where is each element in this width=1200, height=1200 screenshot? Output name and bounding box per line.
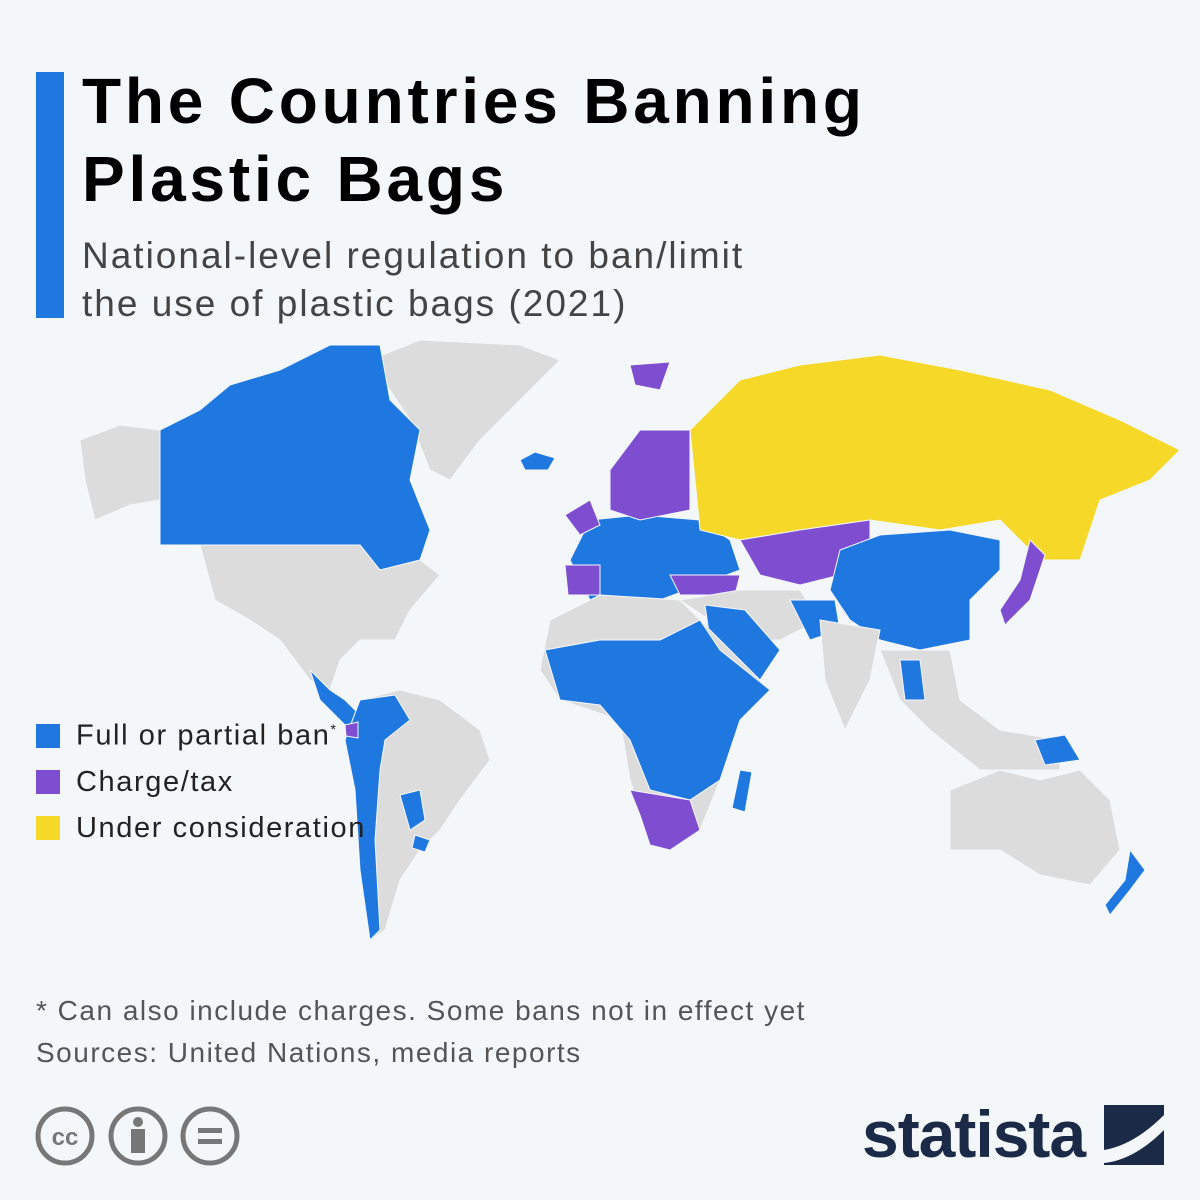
Central America: [310, 670, 365, 735]
China: [830, 530, 1000, 650]
statista logo: statista: [862, 1097, 1085, 1171]
title: [82, 65, 866, 215]
title: Plastic Bags: [82, 143, 508, 215]
Iceland: [520, 452, 555, 470]
Australia: [950, 770, 1120, 885]
world map: [80, 340, 1180, 939]
subtitle: the use of plastic bags (2021): [82, 283, 627, 324]
subtitle: [82, 235, 744, 324]
Japan: [1000, 540, 1045, 625]
USA & Mexico: [200, 545, 440, 690]
New Zealand: [1105, 850, 1145, 915]
SE Asia: [880, 650, 1060, 770]
license icons: cc: [52, 1124, 78, 1151]
footnote: Sources: United Nations, media reports: [36, 1037, 582, 1068]
Europe purple: [610, 430, 690, 520]
subtitle: National-level regulation to ban/limit: [82, 235, 744, 276]
Madagascar: [732, 770, 752, 812]
legend: charge: Charge/tax: [76, 766, 234, 798]
footnote: [36, 995, 806, 1068]
legend: [36, 720, 366, 844]
legend: consideration: Under consideration: [76, 812, 366, 844]
Middle East gray + Saudi: [680, 590, 820, 640]
Canada: [160, 345, 430, 570]
Europe blue: [570, 515, 740, 610]
Kazakhstan / Central Asia: [740, 520, 870, 585]
India: [820, 620, 880, 730]
South America: [345, 690, 490, 940]
Russia: [690, 355, 1180, 560]
legend: ban: Full or partial ban*: [76, 720, 338, 752]
Alaska: [80, 425, 160, 520]
footnote: * Can also include charges. Some bans not in effect yet: [36, 995, 806, 1026]
logo icon: [1104, 1105, 1164, 1165]
title: The Countries Banning: [82, 65, 866, 137]
Greenland: [370, 340, 560, 480]
Africa: [540, 595, 770, 850]
license icons: [36, 1106, 240, 1166]
accent bar: [36, 72, 64, 318]
South America west coast bans: [345, 695, 410, 940]
